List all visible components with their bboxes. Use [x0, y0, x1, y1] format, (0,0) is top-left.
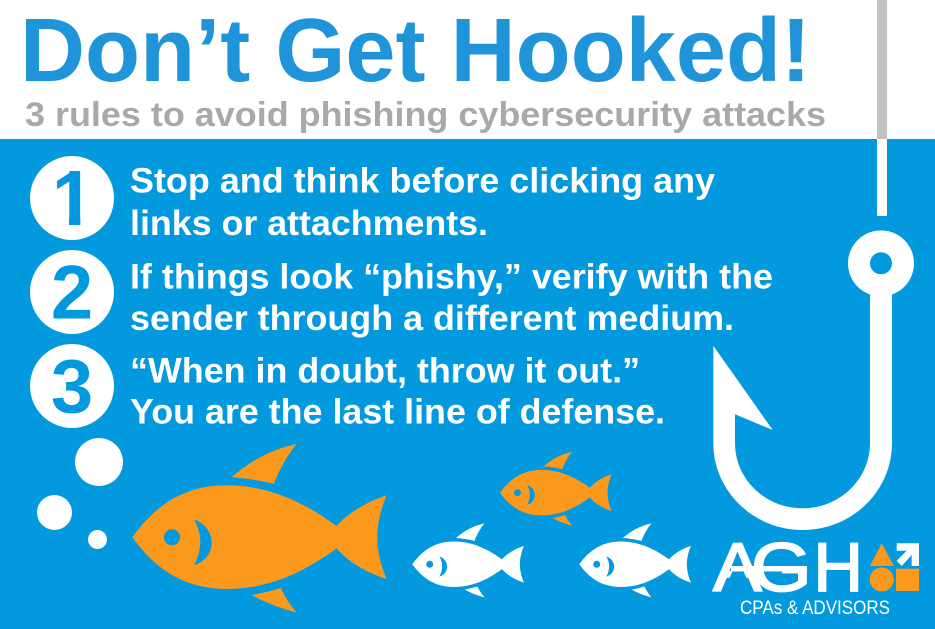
- logo wordmark: G: [751, 529, 812, 606]
- background panel: white header: [0, 0, 935, 140]
- number badge 3: 3: [51, 344, 93, 430]
- logo icon: triangle: [870, 543, 894, 566]
- logo icon: square: [896, 569, 919, 591]
- icon: large orange fish: [132, 444, 387, 613]
- rule 2: [30, 250, 773, 338]
- rule 1 text: Stop and think before clicking any: [130, 162, 716, 201]
- rule 1 text: [130, 162, 716, 243]
- fishing line: white section: [877, 139, 887, 216]
- logo tagline: CPAs & ADVISORS: [740, 598, 890, 619]
- rule 1 text: links or attachments.: [130, 204, 488, 243]
- number badge 1: 1: [52, 157, 94, 242]
- rule 3 text: [130, 352, 665, 432]
- icon: small orange fish: [500, 452, 612, 526]
- rule 3: [30, 344, 665, 432]
- icon: white fish right: [579, 523, 691, 597]
- rule 2 text: If things look “phishy,” verify with the: [130, 257, 773, 296]
- rule 2 text: [130, 257, 773, 338]
- logo icon: arrow: [897, 543, 919, 566]
- logo wordmark: H: [814, 530, 863, 606]
- rule 3 text: “When in doubt, throw it out.”: [130, 352, 640, 391]
- number badge 3: [30, 344, 114, 430]
- number badge 1: [30, 156, 114, 242]
- fishing line: grey section: [877, 0, 887, 139]
- rule 2 text: sender through a different medium.: [130, 299, 734, 338]
- icon: fish hook: [713, 230, 914, 530]
- number badge 2: [30, 250, 114, 335]
- panel: blue water: [0, 139, 935, 629]
- number badge 2: 2: [51, 250, 93, 335]
- logo wordmark: [713, 529, 863, 606]
- logo icon: circle: [870, 568, 894, 592]
- icon: white fish left: [412, 523, 524, 597]
- title: Don’t Get Hooked!: [20, 1, 811, 101]
- logo wordmark: A: [713, 530, 763, 606]
- subtitle: 3 rules to avoid phishing cybersecurity attacks: [25, 96, 826, 134]
- icon: bubbles: [37, 438, 123, 549]
- rule 1: [30, 156, 716, 243]
- rule 3 text: You are the last line of defense.: [130, 392, 665, 432]
- logo: AGH CPAs & Advisors: [713, 529, 919, 619]
